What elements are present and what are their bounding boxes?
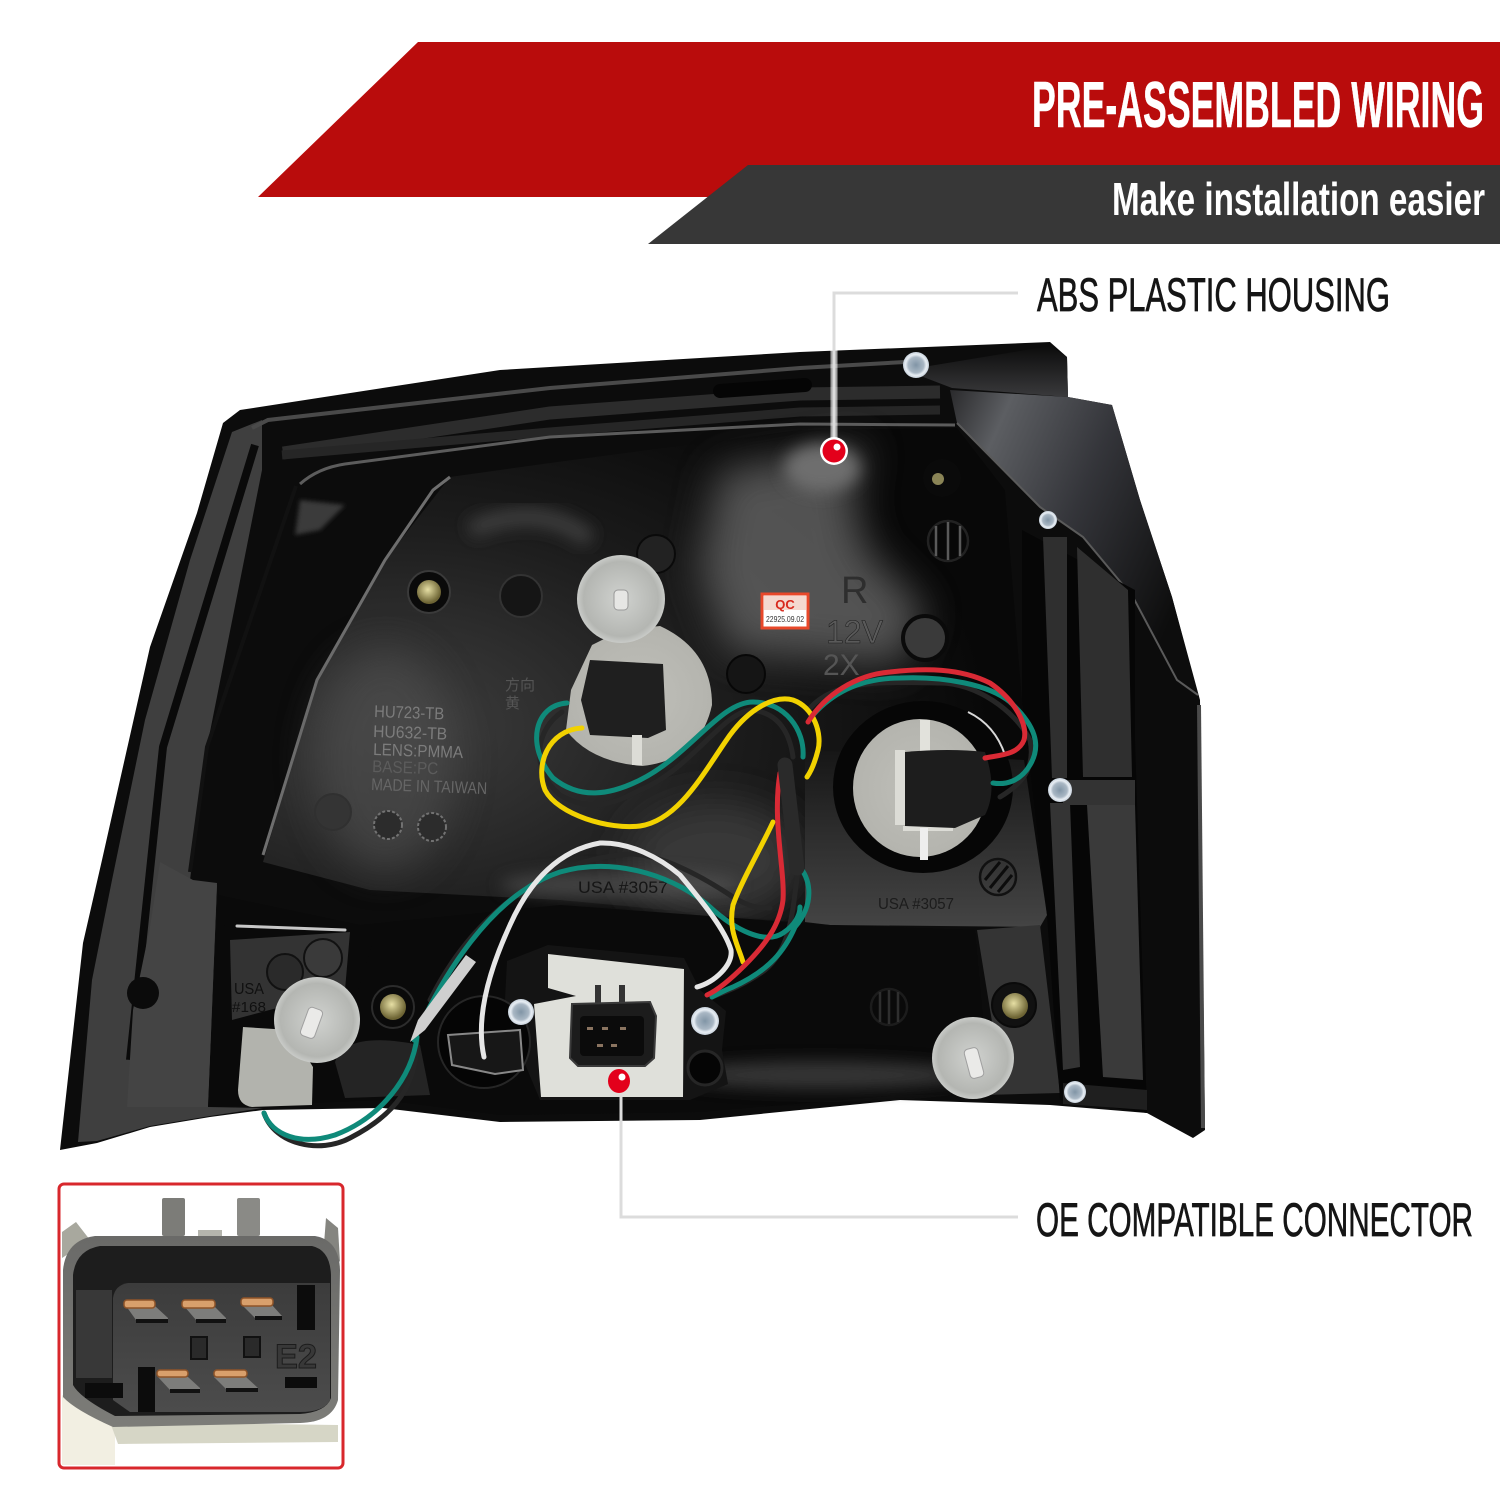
label tape — [534, 954, 684, 1097]
reflection around housing marker — [700, 445, 925, 665]
top rim bands — [190, 362, 955, 872]
left flange outer band — [78, 420, 263, 1142]
moulded tag text — [232, 981, 266, 1016]
striped vents — [871, 521, 1016, 1025]
fastener disc — [577, 555, 665, 643]
copper pins — [124, 1298, 282, 1391]
embossed moulding text: 12V — [826, 614, 884, 650]
QC sticker: QC — [775, 597, 795, 612]
embossed moulding text: LENS:PMMA — [373, 740, 464, 762]
lower hole — [688, 1051, 722, 1085]
QC sticker: 22925.09.02 — [766, 615, 804, 624]
white wire — [481, 843, 731, 1057]
moulded tag text: #168 — [232, 999, 266, 1016]
callout marker — [820, 437, 848, 465]
teal wires — [264, 678, 1036, 1139]
reflection core — [784, 444, 860, 492]
yellow wires — [542, 699, 819, 962]
flange groove — [130, 445, 255, 1060]
right outer wall edge — [1199, 705, 1203, 1128]
flange mounting peg — [127, 977, 159, 1009]
ridge highlight — [237, 926, 345, 930]
moulded tag text: USA — [234, 981, 264, 998]
fin edge — [957, 423, 1198, 695]
right glossy fin — [950, 390, 1198, 695]
fastener disc — [274, 977, 360, 1063]
silver screws — [903, 352, 1086, 1103]
soft highlight left — [315, 650, 455, 870]
embossed moulding text: MADE IN TAIWAN — [371, 775, 487, 798]
connector cavity — [73, 1246, 331, 1416]
QC sticker — [762, 594, 808, 628]
vertical channel — [1022, 530, 1147, 1113]
lower strip glare — [670, 1061, 970, 1089]
soft highlight upper arc — [470, 517, 590, 540]
soft panel behind wiring — [625, 800, 805, 920]
inner left shade — [76, 1290, 112, 1378]
panel contour line — [263, 477, 450, 855]
top corner cap — [905, 346, 1068, 397]
moulded round marks — [315, 794, 446, 841]
inner wall glint — [295, 500, 345, 535]
heading banner: red — [258, 42, 1500, 197]
left bulb socket — [566, 555, 712, 766]
right bulb socket — [833, 701, 1013, 873]
embossed moulding text: R — [841, 570, 868, 612]
beige tape — [62, 1395, 115, 1465]
bracket screws — [508, 999, 719, 1035]
tail lamp photo: rear view — [60, 342, 1205, 1150]
terminal deck — [113, 1283, 330, 1412]
grommet — [438, 996, 530, 1088]
embossed moulding text: 2X — [823, 649, 860, 682]
embossed moulding text: 方向 — [505, 677, 535, 694]
heat-shrink tube — [785, 765, 797, 868]
lower recess — [208, 895, 1000, 1115]
tag plugs — [267, 954, 303, 990]
lower right block — [977, 925, 1060, 1095]
moulded E2 mark: E2 — [275, 1338, 317, 1376]
panel bottom glare — [500, 871, 740, 899]
channel strips — [1043, 537, 1147, 1110]
brass screws — [372, 459, 1036, 1028]
subheading banner: dark — [648, 165, 1500, 244]
pin tabs — [162, 1198, 185, 1236]
connector plug — [570, 985, 656, 1066]
embossed moulding text: USA #3057 — [878, 896, 954, 913]
lower left bulb holder — [218, 890, 372, 1107]
inset frame — [59, 1184, 343, 1468]
connector bracket — [438, 945, 728, 1100]
lower right fastener disc — [932, 1017, 1014, 1099]
slots — [85, 1285, 317, 1412]
recess left soft panel — [335, 1040, 430, 1098]
bulb box — [238, 1027, 313, 1107]
lower left gray block — [127, 862, 217, 1107]
moulded tag — [230, 932, 350, 1020]
embossed moulding text — [371, 570, 954, 913]
embossed moulding text: USA #3057 — [578, 878, 668, 897]
inset: connector close-up — [59, 1184, 343, 1468]
callout: OE compatible connector — [608, 1069, 1473, 1246]
callout marker — [608, 1069, 630, 1093]
wire tape — [410, 955, 476, 1042]
lower panel right — [805, 750, 1047, 927]
connector shell — [63, 1236, 340, 1427]
embossed moulding text: HU632-TB — [373, 722, 447, 744]
lamp outer body — [60, 342, 1205, 1150]
embossed moulding text: 黄 — [505, 695, 520, 712]
embossed moulding text: HU723-TB — [374, 702, 444, 723]
holes and plugs — [500, 535, 947, 693]
inset background — [60, 1185, 342, 1467]
wiring harness — [264, 670, 1036, 1146]
black wires — [264, 683, 1031, 1146]
red wires — [707, 670, 1025, 995]
callout: ABS plastic housing — [820, 268, 1390, 465]
main inner panel — [263, 428, 1047, 927]
embossed moulding text: BASE:PC — [372, 757, 438, 778]
